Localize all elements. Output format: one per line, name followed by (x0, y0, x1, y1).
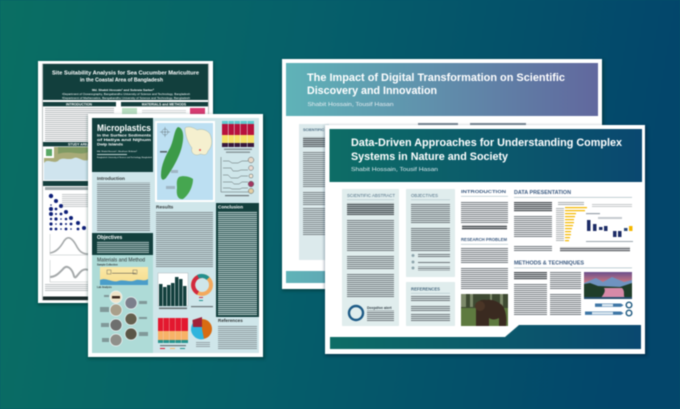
heading: methods and techniques: METHODS & TECHNIQUES (514, 260, 584, 266)
study area map panel (155, 121, 215, 202)
back poster footer (286, 271, 598, 283)
panel: scientific abstract (342, 189, 399, 326)
references (218, 318, 257, 350)
correlation matrix dots (49, 194, 88, 230)
study area map (43, 142, 90, 180)
results text: Results (156, 204, 174, 210)
back poster abstract panel (299, 124, 329, 260)
study area map: STUDY AREA (68, 143, 90, 147)
heading: methods and techniques (514, 260, 632, 268)
objectives box (92, 233, 153, 255)
objectives box: Objectives (97, 235, 123, 241)
donut chart (191, 276, 213, 307)
poster: site suitability for sea cucumber (38, 61, 214, 305)
panel: references: REFERENCES (411, 286, 440, 292)
title block: Microplastics (97, 123, 151, 133)
panel: scientific abstract: SCIENTIFIC ABSTRACT (347, 193, 395, 198)
introduction text (97, 176, 150, 232)
results bar chart (158, 273, 188, 309)
panel: references (406, 282, 455, 326)
front poster header: Systems in Nature and Society (351, 151, 509, 163)
front poster header: Data-Driven Approaches for Understanding Complex (351, 137, 623, 149)
poster header band: ²Department of Mathematics, Bangabandhu University of Science and Technology, Bangladesh (62, 96, 191, 100)
lab analysis labels (100, 295, 148, 342)
column: introduction (461, 189, 508, 230)
materials and methods section (121, 102, 208, 114)
front poster footer (330, 325, 641, 349)
panel: objectives: OBJECTIVES (411, 193, 438, 198)
photo: mountain lake at sunset (584, 272, 632, 299)
poster header band: Site Suitability Analysis for Sea Cucumber Mariculture (52, 70, 199, 76)
front poster header: Shabit Hossain, Tousif Hasan (351, 167, 438, 173)
title block: Md. Shabit Hossain¹, Sharifuzzi Shifatun² (97, 150, 137, 153)
flow pills with icons (585, 302, 632, 316)
poster footer bar (43, 296, 88, 300)
title block: of Hatiya and Nijhum (97, 138, 151, 142)
pie chart (191, 317, 212, 348)
methods text columns (514, 272, 581, 315)
title block: In the Surface Sediments (97, 134, 151, 138)
poster header band (43, 64, 208, 100)
amber horizontal bar chart (556, 202, 587, 242)
title block: Bangladesh University of Science and Technology, Bangladesh (97, 156, 152, 159)
poster header band: Md. Shabit Hossain¹ and Subrata Sarker² (92, 88, 154, 92)
back poster abstract panel: SCIENTIFIC (303, 128, 324, 132)
results stacked chart (158, 318, 188, 349)
correlation matrix heading (43, 181, 88, 190)
materials and methods section: MATERIALS and METHODS (142, 103, 187, 107)
poster header band: in the Coastal Area of Bangladesh (80, 78, 164, 84)
materials and method panel: Materials and Method (97, 258, 145, 264)
introduction text: Introduction (97, 176, 125, 182)
column: research problem: RESEARCH PROBLEM (461, 237, 507, 242)
deepdive callout: Deepdive alert (367, 306, 392, 310)
back poster section headings (418, 123, 526, 125)
back poster header: Discovery and Innovation (307, 85, 437, 97)
ring icon (349, 306, 363, 320)
title block (92, 118, 153, 172)
title block: Dwip Islands (97, 142, 123, 146)
sampling diagram (100, 267, 148, 285)
introduction section (43, 102, 116, 141)
heading: data presentation (514, 190, 632, 198)
lab analysis photos (110, 291, 137, 346)
heading: data presentation: DATA PRESENTATION (514, 190, 571, 196)
back poster header: Shabit Hossain, Tousif Hasan (308, 102, 394, 108)
column: introduction: INTRODUCTION (461, 189, 507, 194)
poster header band: ¹Department of Oceanography, Bangabandhu University of Science and Technology, Bangladesh (62, 92, 191, 96)
poster: microplastics (88, 114, 265, 359)
stacked bar chart (222, 121, 254, 153)
compass icon (160, 127, 170, 137)
introduction section: INTRODUCTION (66, 103, 93, 107)
results text (156, 204, 213, 267)
line and spectra chart (221, 157, 254, 196)
conclusion box: Conclusion (218, 204, 243, 210)
back poster header (286, 63, 598, 116)
data presentation text (514, 202, 552, 251)
navy column chart (586, 203, 633, 242)
column: research problem (461, 237, 508, 290)
chart caption (560, 247, 630, 252)
front poster header (330, 129, 642, 182)
figure caption (45, 284, 88, 291)
materials and method panel: Lab Analysis (97, 286, 112, 289)
photo: brown bear (461, 294, 508, 326)
materials and method panel (92, 255, 153, 353)
materials and method panel: Sample Collection (97, 264, 118, 266)
poster: impact of digital transformation (282, 59, 604, 291)
conclusion box (216, 203, 259, 317)
panel: objectives (406, 189, 455, 277)
back poster header: The Impact of Digital Transformation on Scientific (307, 72, 565, 84)
poster: data-driven approaches (325, 125, 647, 356)
line charts (50, 234, 88, 282)
references: References (218, 318, 243, 323)
